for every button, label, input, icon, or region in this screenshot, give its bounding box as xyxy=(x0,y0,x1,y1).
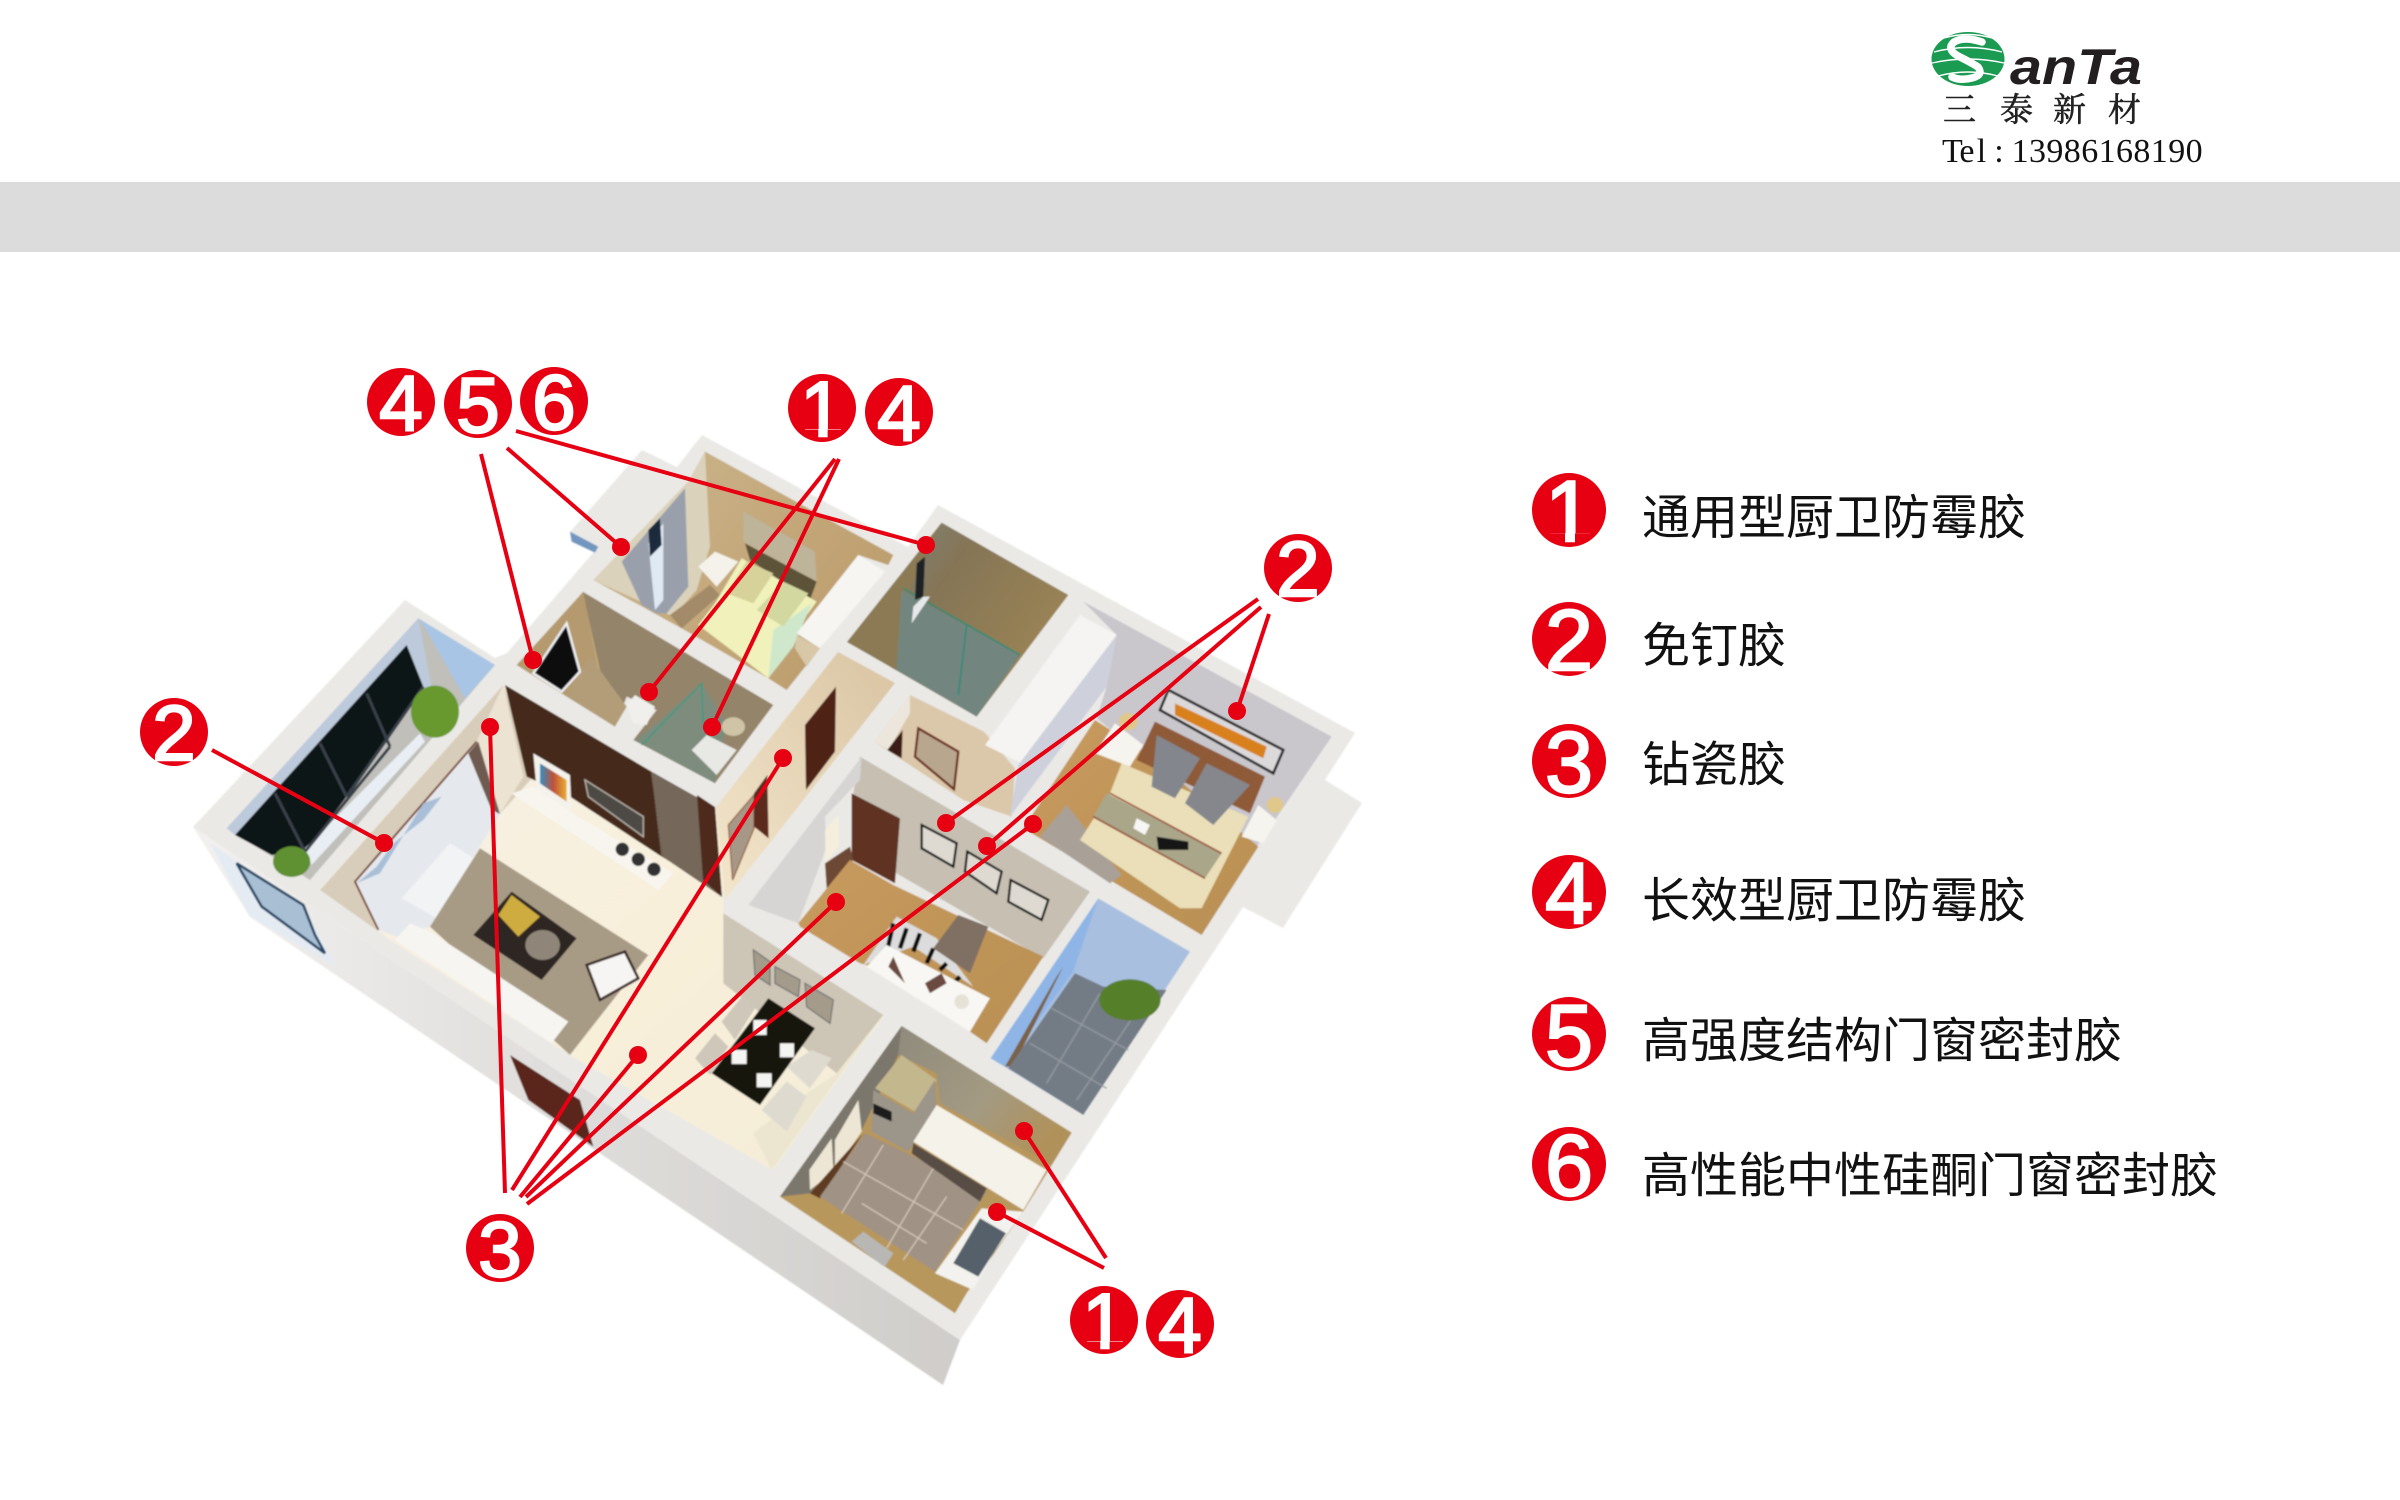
ledge and side window xyxy=(210,843,337,967)
legend item 4 xyxy=(1532,846,2026,942)
dining table xyxy=(712,998,815,1105)
legend item 2: 2 xyxy=(1545,593,1593,689)
nightstands xyxy=(1095,723,1143,767)
badge 2 left xyxy=(140,689,208,777)
study pictures xyxy=(922,825,957,867)
room: upper balcony xyxy=(227,618,495,880)
header band xyxy=(0,182,2400,252)
legend item 3: 3 xyxy=(1545,715,1593,811)
badge 1 upper: 1 xyxy=(800,365,844,453)
legend item 2: 免钉胶 xyxy=(1642,620,1786,673)
coffee table xyxy=(473,892,577,980)
callout badges on plan xyxy=(140,358,1332,1369)
study door xyxy=(852,793,900,883)
artwork xyxy=(533,753,572,812)
badge 4 upper: 4 xyxy=(877,369,921,457)
room: small corridor room xyxy=(874,695,1015,817)
fridge xyxy=(875,1055,937,1112)
legend item 6: 高性能中性硅酮门窗密封胶 xyxy=(1642,1150,2218,1203)
legend item 4: 长效型厨卫防霉胶 xyxy=(1642,875,2026,928)
room: small bathroom xyxy=(517,592,773,783)
balcony plant xyxy=(1099,979,1161,1021)
plants xyxy=(411,686,459,738)
badge 6 xyxy=(520,358,588,446)
headboard xyxy=(743,512,817,582)
washer xyxy=(852,1232,893,1267)
badge 1 lower xyxy=(1070,1286,1138,1354)
badge 3: 3 xyxy=(478,1205,522,1293)
wall tops silhouette xyxy=(193,435,1362,1340)
kitchen tile floor xyxy=(820,1133,987,1272)
exterior front door xyxy=(510,1055,593,1147)
callout anchor dots xyxy=(375,536,1246,1221)
logo Chinese name: 三泰新材 xyxy=(1943,92,2141,129)
console xyxy=(512,787,673,890)
legend item 5: 高强度结构门窗密封胶 xyxy=(1642,1015,2122,1068)
window xyxy=(235,645,423,855)
badge 2 right: 2 xyxy=(1276,525,1320,613)
white column xyxy=(985,615,1117,763)
legend item 1: 1 xyxy=(1545,464,1593,560)
legend item 6 xyxy=(1532,1118,2218,1214)
study floor xyxy=(798,860,1043,1043)
badge 5: 5 xyxy=(456,361,500,449)
legend item 5: 5 xyxy=(1545,988,1593,1084)
zebra chair and armchair xyxy=(863,917,973,987)
hall wall with doors xyxy=(716,652,895,900)
study desk xyxy=(867,945,990,1032)
apartment 3D floor plan xyxy=(193,435,1362,1385)
rug xyxy=(1040,805,1122,883)
legend item 1: 通用型厨卫防霉胶 xyxy=(1642,492,2026,545)
room: master bedroom xyxy=(985,602,1332,935)
bathroom window xyxy=(533,623,580,692)
dining chairs xyxy=(722,995,755,1040)
room: lower balcony xyxy=(991,898,1190,1115)
counter xyxy=(913,1105,1047,1210)
living floor xyxy=(321,685,883,1170)
TV wall xyxy=(505,685,662,857)
bedroom wall xyxy=(1083,602,1332,847)
bed xyxy=(698,558,817,678)
badge 3 xyxy=(466,1205,534,1293)
badge 2 right xyxy=(1264,525,1332,613)
rug xyxy=(430,848,648,1055)
badge 1 lower: 1 xyxy=(1082,1277,1126,1365)
balcony tile floor xyxy=(1008,973,1167,1115)
badge 4 xyxy=(367,359,435,447)
bedroom painting xyxy=(1160,690,1283,773)
badge 4 lower: 4 xyxy=(1158,1281,1202,1369)
grey panel and dark strip xyxy=(651,772,722,897)
white partition xyxy=(797,555,885,648)
bed xyxy=(1137,722,1265,813)
legend item 4: 4 xyxy=(1545,846,1593,942)
curtain xyxy=(622,488,688,613)
room: dining xyxy=(695,913,883,1170)
room: upper bedroom xyxy=(593,452,893,690)
legend item 3 xyxy=(1532,715,1786,811)
logo wordmark: anTa xyxy=(2010,39,2142,95)
telephone: Tel:13986168190 xyxy=(1942,133,2203,170)
window wall xyxy=(320,685,533,930)
legend item 2 xyxy=(1532,593,1786,689)
sliding door area xyxy=(355,742,500,937)
legend item 5 xyxy=(1532,988,2122,1084)
room: master bathroom xyxy=(847,523,1068,717)
badge 4 upper xyxy=(865,369,933,457)
legend item 3: 钻瓷胶 xyxy=(1642,739,1786,792)
armchair xyxy=(587,952,638,1000)
logo icon: green globe with S xyxy=(1932,32,2004,86)
callout leader lines xyxy=(212,431,1269,1268)
legend xyxy=(1532,464,2218,1214)
badge 2 left: 2 xyxy=(152,689,196,777)
shower floor xyxy=(897,590,1020,717)
badge 6: 6 xyxy=(532,358,576,446)
kitchen back wall xyxy=(898,1026,1072,1165)
shower glass xyxy=(635,683,727,783)
logo: Santa company brand xyxy=(1932,32,2203,170)
bedroom floor xyxy=(1023,720,1258,935)
badge 1 upper xyxy=(788,374,856,442)
room: living room xyxy=(320,685,883,1170)
ottoman xyxy=(402,843,480,918)
sink xyxy=(935,1208,1023,1290)
room: study xyxy=(748,757,1090,1043)
legend item 1 xyxy=(1532,473,2024,547)
exterior side face xyxy=(193,827,960,1385)
room: kitchen xyxy=(780,1026,1072,1313)
badge 5 xyxy=(444,361,512,449)
badge 4: 4 xyxy=(379,359,423,447)
badge 4 lower xyxy=(1146,1281,1214,1369)
sofa xyxy=(413,932,568,1043)
legend item 6: 6 xyxy=(1545,1118,1593,1214)
TV xyxy=(585,780,643,837)
